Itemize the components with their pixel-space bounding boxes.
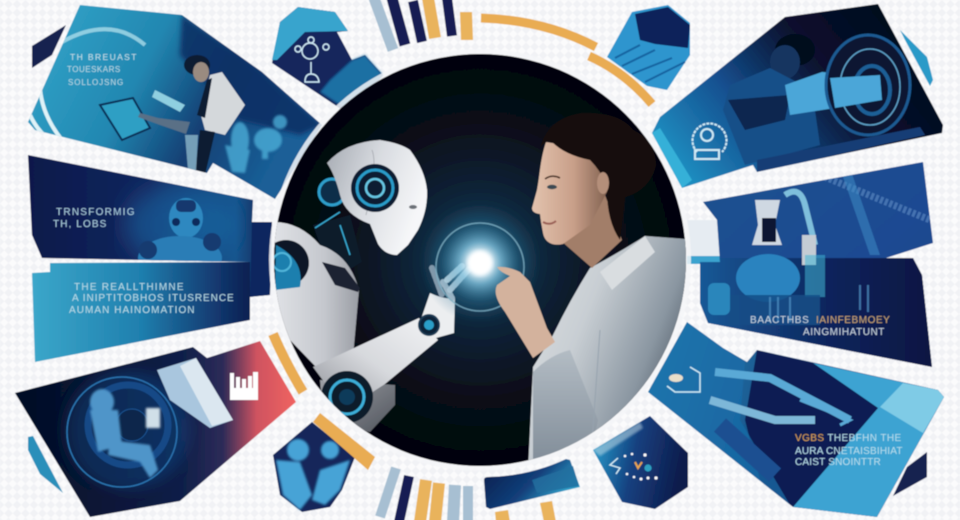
text: transforming heading bbox=[53, 207, 136, 230]
icon: navy shard right bbox=[893, 452, 927, 496]
panel figure: robot arms bbox=[710, 372, 850, 475]
text: human automation banner bbox=[69, 282, 235, 316]
panel figure: man with tablet bbox=[100, 55, 245, 175]
text: top-left card: TOUESKARS bbox=[67, 65, 121, 74]
panel: top-left consulting card bbox=[28, 5, 322, 199]
text: transforming heading: TH, LOBS bbox=[53, 219, 107, 230]
figure: robot forearm bbox=[420, 293, 455, 338]
text: augmentation caption: AINGMIHATUNT bbox=[803, 327, 885, 338]
panel figure: engineer bbox=[723, 34, 830, 165]
figure: robot lower body bbox=[320, 380, 395, 432]
panel figure: astronaut bbox=[90, 389, 160, 478]
figure: woman eye and lips bbox=[543, 176, 560, 224]
panel: factory robot with text bbox=[687, 162, 940, 370]
panel: bottom navy card bbox=[484, 459, 580, 520]
panel: hexagon with workers bbox=[273, 422, 355, 512]
arc: orange lower segment bbox=[313, 413, 375, 470]
panel: top-right hexagon bbox=[607, 5, 690, 90]
text: human automation banner: A INIPTITOBHOS ITUSRENCE bbox=[72, 293, 235, 304]
panel: top shield with tree icon bbox=[272, 7, 383, 115]
panel figure: hologram robots bbox=[225, 115, 287, 173]
figure: glow and ring bbox=[424, 206, 536, 316]
icon: small navy shard top-left bbox=[32, 25, 66, 68]
text: top-left card: SOLLOJSNG bbox=[68, 78, 124, 87]
chart: top bars bbox=[374, 0, 473, 50]
panel: astronaut and red chart card bbox=[15, 341, 296, 517]
icon: outlined hand badge bbox=[667, 367, 700, 392]
text: human automation banner: AUMAN HAINOMATION bbox=[69, 305, 196, 316]
text: robotic arm caption bbox=[795, 433, 903, 468]
figure: robot upper arm bbox=[312, 317, 439, 392]
figure: woman bbox=[496, 113, 700, 470]
ring: white halo around central circle bbox=[269, 49, 691, 471]
panel figure: blue robot bust bbox=[137, 198, 222, 262]
panel: human automation banner bbox=[32, 262, 250, 362]
icon: teal crescent shard bbox=[28, 436, 63, 493]
text: robotic arm caption: CAIST SNOINTTR bbox=[795, 457, 881, 468]
text: transforming heading: TRNSFORMIG bbox=[56, 207, 136, 218]
panel: bottom hexagon badge bbox=[593, 416, 688, 509]
panel: robotic arm card bbox=[648, 322, 944, 517]
panel: transforming jobs bbox=[28, 155, 272, 297]
text: robotic arm caption: AURA CNETAISBIHIAT bbox=[795, 446, 903, 457]
figure: woman face bbox=[532, 142, 608, 245]
panel: central circle bbox=[263, 54, 700, 470]
text: top-left card: TH BREUAST bbox=[70, 52, 138, 62]
text: augmentation caption bbox=[750, 315, 890, 338]
arc: top orange segment two bbox=[589, 56, 652, 104]
panel: engineer with wheel bbox=[652, 4, 943, 188]
text: augmentation caption: BAACTHBS bbox=[750, 315, 810, 326]
icon: white bar chart bbox=[230, 372, 258, 400]
figure: woman hair bbox=[540, 113, 656, 240]
icon: glowing tree bbox=[295, 37, 329, 82]
figure: robot head bbox=[327, 140, 427, 255]
text: augmentation caption: IAINFEBMOEY bbox=[816, 315, 890, 326]
figure: robot bbox=[263, 140, 470, 432]
text: human automation banner: THE REALLTHIMNE bbox=[74, 282, 185, 293]
arc: orange left segment bbox=[273, 334, 303, 392]
figure: robot fingers bbox=[432, 266, 470, 298]
figure: woman neck bbox=[560, 195, 622, 268]
arc: top orange segment one bbox=[481, 18, 596, 47]
figure: woman hand bbox=[496, 267, 555, 358]
panel figure: scanner rings bbox=[67, 377, 177, 487]
icon: robot head badge bbox=[692, 123, 726, 159]
text: top-left card bbox=[67, 52, 138, 87]
chart: bottom bars bbox=[380, 468, 468, 520]
icon: dial with check bbox=[610, 453, 658, 480]
panel figure: wheel bbox=[826, 35, 910, 135]
text: robotic arm caption: VGBS THEBFHN THE bbox=[795, 433, 902, 444]
panel figure: robot arm bbox=[752, 192, 816, 265]
